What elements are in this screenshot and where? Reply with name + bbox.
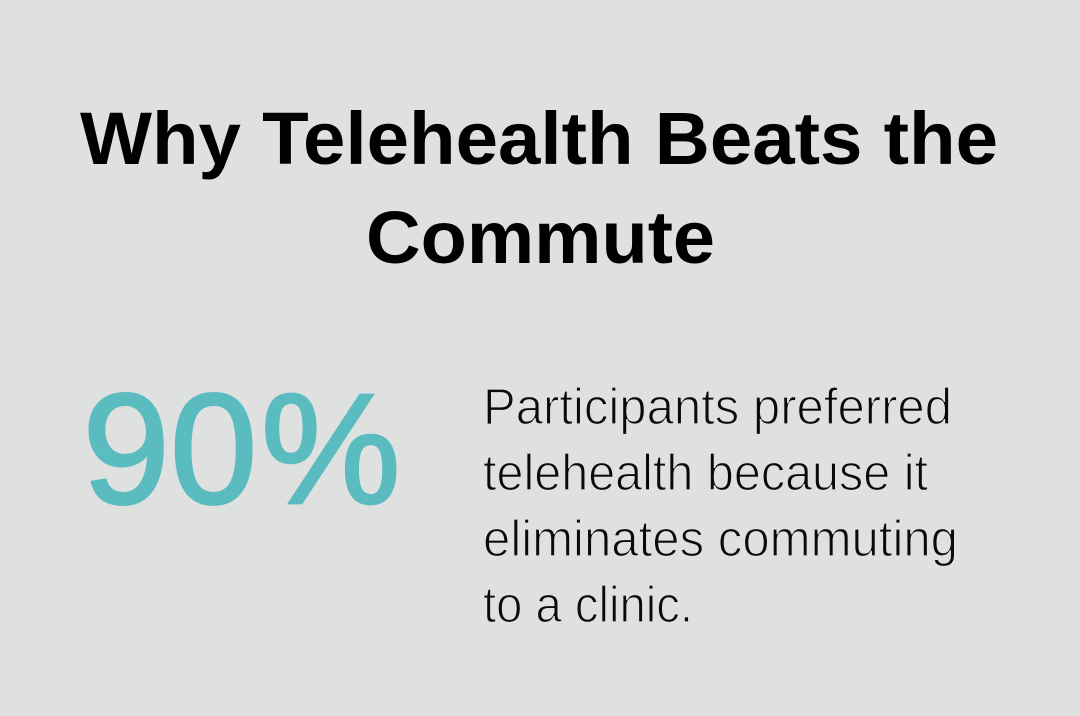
description text: Participants preferred (483, 378, 952, 435)
description text: to a clinic. (483, 576, 693, 633)
title: Commute (366, 196, 715, 279)
title (80, 97, 998, 279)
statistic: 90%: 90% (82, 362, 401, 537)
description text: telehealth because it (483, 444, 928, 501)
title: Why Telehealth Beats the (80, 97, 998, 180)
description text (483, 378, 958, 633)
description text: eliminates commuting (483, 510, 958, 567)
